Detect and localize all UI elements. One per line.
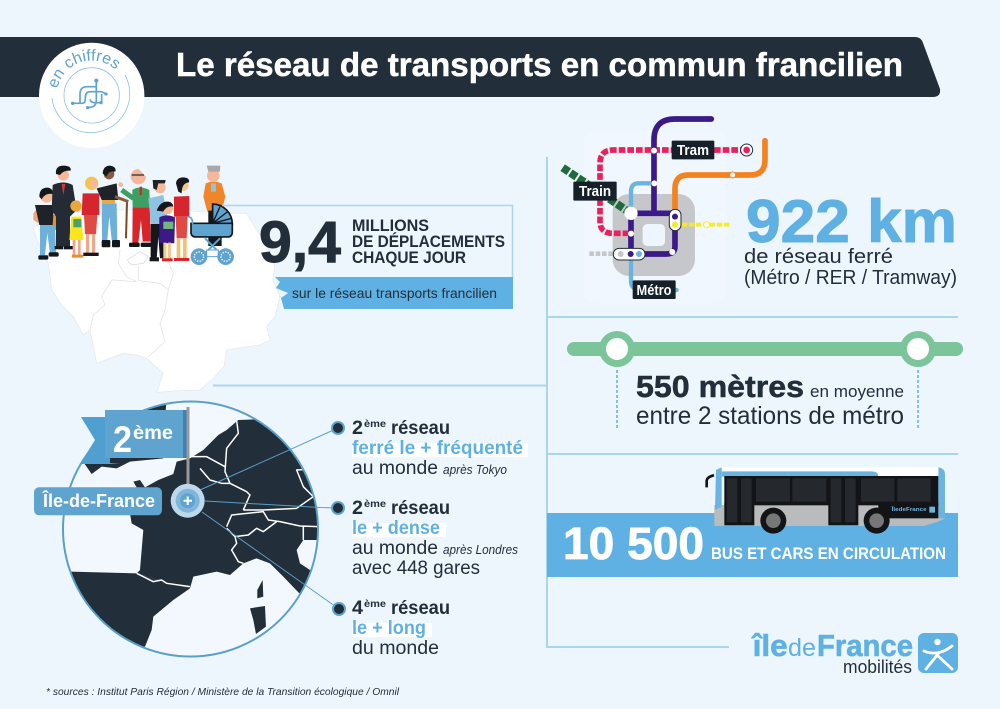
marker: Paris	[171, 484, 205, 518]
rank: ferré le + fréquenté: 2	[352, 418, 363, 439]
person: grandmother in orange	[203, 166, 225, 246]
badge: en chiffres	[39, 42, 144, 148]
metro line graphic	[574, 334, 956, 428]
diagram: rail network: Train	[579, 184, 611, 200]
label: Île-de-France: Île-de-France	[42, 490, 155, 511]
rank: ferré le + fréquenté: au monde	[352, 458, 438, 479]
rank: le + dense: ème	[364, 498, 386, 510]
rank: ferré le + fréquenté: ferré le + fréquenté	[352, 438, 523, 459]
stat: 922 km	[744, 188, 957, 289]
leader lines	[200, 428, 339, 609]
borders	[137, 421, 320, 587]
map: Europe globe	[63, 393, 330, 656]
rank: le + long	[333, 598, 450, 659]
icon: bus: ÎledeFrance	[890, 505, 927, 513]
title banner: Le réseau de transports en commun francilien	[176, 46, 903, 83]
rank: le + long: 4	[352, 598, 363, 619]
person: man in black tee	[97, 166, 128, 247]
stat: 9,4 millions de déplacements: 9,4	[259, 210, 341, 275]
title banner	[0, 37, 940, 97]
rank: le + long: réseau	[391, 598, 450, 619]
ribbon: réseau transports francilien	[275, 277, 513, 309]
stat: 922 km: de réseau ferré	[744, 245, 893, 268]
rank: le + dense: avec 448 gares	[352, 558, 480, 579]
panel: connector lines	[213, 157, 958, 648]
band: 10 500 bus et cars	[547, 513, 958, 577]
logo: Île-de-France Mobilités: France	[817, 628, 913, 663]
logo: Île-de-France Mobilités	[751, 628, 958, 677]
stat: 922 km: (Métro / RER / Tramway)	[744, 266, 957, 289]
flag: 2ème: ème	[133, 423, 173, 444]
rank: le + dense: réseau	[391, 498, 450, 519]
land masses	[84, 404, 166, 474]
rank: le + dense: le + dense	[352, 518, 440, 539]
stat: 9,4 millions de déplacements: CHAQUE JOUR	[352, 249, 466, 267]
stat: 9,4 millions de déplacements: MILLIONS	[352, 217, 429, 235]
band: 10 500 bus et cars: 10 500	[563, 518, 704, 569]
rank: le + long: le + long	[352, 618, 426, 639]
rank: le + long: du monde	[352, 638, 439, 659]
stat: 922 km: 922 km	[746, 188, 957, 255]
logo: Île-de-France Mobilités: mobilités	[843, 656, 912, 677]
person: man in suit	[52, 166, 77, 249]
rank: le + dense: après Londres	[443, 543, 518, 557]
stat: 550 mètres: entre 2 stations de métro	[636, 402, 904, 430]
diagram: rail network	[563, 119, 765, 303]
stat: 550 mètres	[636, 369, 904, 430]
stat: 9,4 millions de déplacements: DE DÉPLACEMENTS	[352, 232, 505, 251]
logo: Île-de-France Mobilités: de	[788, 634, 816, 662]
stat: 9,4 millions de déplacements	[222, 206, 513, 309]
person: man in light blue shirt	[148, 180, 167, 261]
flag: 2ème	[80, 407, 190, 484]
rank: ferré le + fréquenté: ème	[364, 418, 386, 430]
ribbon: réseau transports francilien: sur le réseau transports francilien	[292, 285, 497, 301]
illustration: group of travellers	[33, 166, 234, 265]
person: woman in red	[174, 177, 189, 261]
rank: le + dense: au monde	[352, 538, 438, 559]
person: child in purple	[157, 202, 175, 261]
rank: le + dense	[332, 498, 518, 579]
band: 10 500 bus et cars: BUS ET CARS EN CIRCULATION	[711, 544, 946, 563]
icon: network	[71, 79, 108, 109]
person: old man in green	[118, 168, 151, 247]
rank: le + dense: 2	[352, 498, 363, 519]
rank: le + long: ème	[364, 598, 386, 610]
flag: 2ème: 2	[113, 419, 132, 460]
stat: 550 mètres: 550 mètres	[636, 369, 804, 404]
badge: en chiffres: en chiffres	[50, 49, 120, 88]
icon: bus	[707, 467, 945, 534]
logo: Île-de-France Mobilités: île	[751, 628, 788, 663]
rank: ferré le + fréquenté: réseau	[391, 418, 450, 439]
sources note: * sources : Institut Paris Région / Ministère de la Transition écologique / Omnil	[46, 686, 400, 698]
icon: pram	[188, 204, 234, 265]
icon: running figure	[918, 633, 958, 673]
stat: 550 mètres: en moyenne	[810, 382, 904, 401]
rank: ferré le + fréquenté: après Tokyo	[443, 463, 507, 477]
map: Île-de-France departments	[33, 210, 280, 392]
diagram: rail network: Tram	[677, 143, 709, 159]
diagram: rail network: Métro	[636, 283, 672, 299]
rank: ferré le + fréquenté	[332, 418, 528, 479]
person: blonde woman	[82, 177, 99, 256]
person: boy	[33, 188, 62, 260]
label: Île-de-France	[34, 487, 162, 515]
person: girl in yellow	[69, 200, 83, 258]
